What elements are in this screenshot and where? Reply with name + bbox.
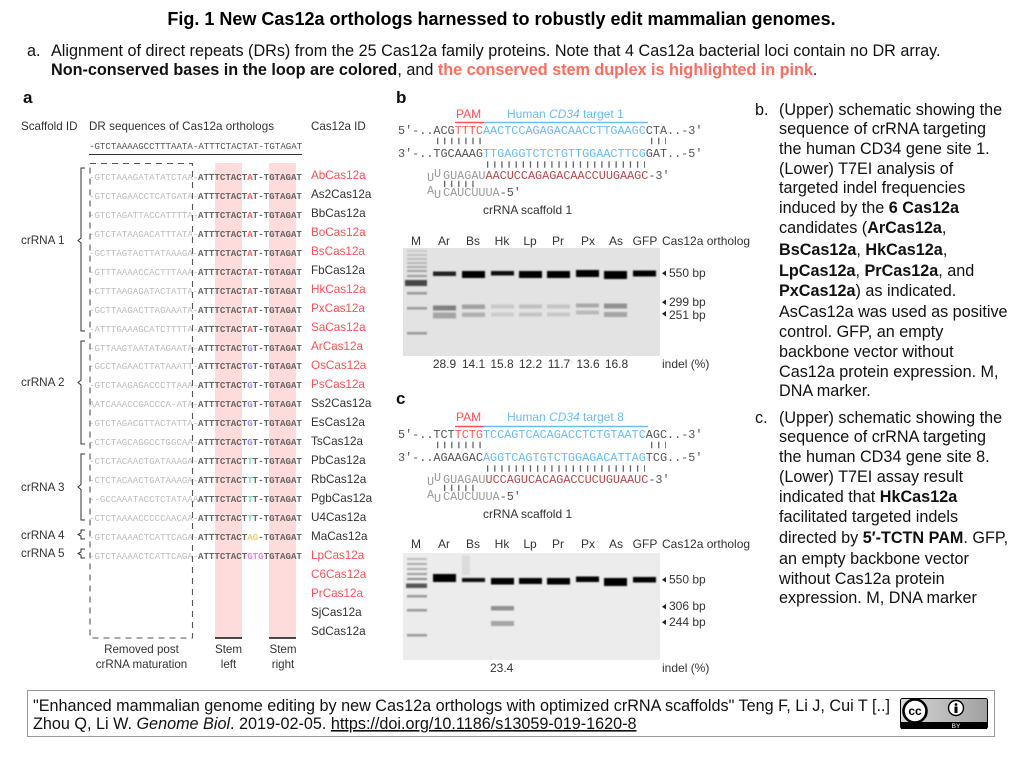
- crRNA structure c: A: [427, 488, 435, 502]
- crRNA structure c: GUAGAUUCCAGUCACAGACCUCUGUAAUC-3′: [443, 473, 670, 487]
- conserved sequences: ATTTCTACTTT-TGTAGAT: [198, 456, 302, 467]
- caption b: b.: [755, 101, 769, 119]
- scaffold labels: crRNA 5: [21, 547, 65, 560]
- gel c lane labels: Lp: [523, 537, 537, 551]
- removed sequences: AATCAAACCGACCCA-ATA-: [89, 399, 198, 410]
- caption a: a.: [27, 42, 41, 60]
- gel c lane labels: M: [411, 537, 421, 551]
- conserved sequences: ATTTCTACTAT-TGTAGAT: [198, 210, 302, 221]
- gel b lane labels: Cas12a ortholog: [662, 234, 750, 248]
- removed sequences: -GTCTATAAGACATTTATA-: [89, 229, 198, 240]
- Cas12a names: BbCas12a: [311, 207, 366, 220]
- gel c lane labels: Bs: [466, 537, 480, 551]
- scaffold labels: crRNA 2: [21, 376, 65, 389]
- Cas12a names: PrCas12a: [311, 587, 363, 600]
- gel c lane labels: Pr: [552, 537, 564, 551]
- removed sequences: -GCCTAGAACTTATAAATT-: [89, 361, 198, 372]
- removed sequences: -GTTAAGTAATATAGAATA-: [89, 343, 198, 354]
- scaffold labels: crRNA 4: [21, 529, 65, 542]
- gel b lane labels: As: [609, 234, 623, 248]
- caption a: [27, 42, 941, 79]
- consensus sequence: -GTCTAAAAGCCTTTAATA-ATTTCTACTAT-TGTAGAT: [89, 141, 303, 152]
- panel letter c: c: [396, 389, 405, 408]
- Cas12a names: PbCas12a: [311, 454, 366, 467]
- PAM and target labels: [455, 107, 648, 122]
- Cas12a names: Ss2Cas12a: [311, 397, 372, 410]
- conserved sequences: ATTTCTACTAG-TGTAGAT: [198, 532, 302, 543]
- gel b lane labels: Px: [581, 234, 595, 248]
- removed sequences: -GTTTAAAACCACTTTAAA-: [89, 267, 198, 278]
- gel b lane labels: GFP: [633, 234, 657, 248]
- removed sequences: -GCTTAGTACTTATAAAGA-: [89, 248, 198, 259]
- gel b lane labels: Ar: [438, 234, 450, 248]
- removed sequences: -GTCTAAAACTCATTCAGA-: [89, 532, 198, 543]
- gel c indel values: indel (%): [662, 661, 709, 675]
- caption b: induced by the 6 Cas12a: [779, 199, 960, 217]
- gel b indel values: [433, 357, 709, 371]
- gel b size markers: 299 bp: [669, 295, 706, 309]
- target strand sequences: 3′-..TGCAAAGTTGAGGTCTCTGTTGGAACTTCGGAT..-5′: [398, 147, 702, 161]
- caption a: Non-conserved bases in the loop are colored, and the conserved stem duplex is highlighted in pink.: [51, 61, 817, 79]
- panel c schematic: [396, 389, 702, 521]
- conserved sequences: ATTTCTACTGT-TGTAGAT: [198, 399, 302, 410]
- crRNA structure: CAUCUUUA-5′: [443, 186, 521, 200]
- conserved sequences: ATTTCTACTAT-TGTAGAT: [198, 191, 302, 202]
- conserved sequences: ATTTCTACTGT-TGTAGAT: [198, 361, 302, 372]
- scaffold label b: crRNA scaffold 1: [483, 203, 572, 217]
- conserved sequences: ATTTCTACTTT-TGTAGAT: [198, 475, 302, 486]
- gel b lane labels: Hk: [495, 234, 510, 248]
- citation text: "Enhanced mammalian genome editing by new Cas12a orthologs with optimized crRNA scaffolds" Teng F, Li J, Cui T [..]: [33, 697, 890, 715]
- caption c: (Lower) T7EI assay result: [779, 468, 964, 486]
- gel b lane labels: Pr: [552, 234, 564, 248]
- conserved sequences: ATTTCTACTAT-TGTAGAT: [198, 305, 302, 316]
- conserved sequences: ATTTCTACTGT-TGTAGAT: [198, 437, 302, 448]
- Cas12a names: PsCas12a: [311, 378, 365, 391]
- gel c indel values: [490, 661, 709, 675]
- gel b lane labels: Bs: [466, 234, 480, 248]
- conserved sequences: ATTTCTACTAT-TGTAGAT: [198, 229, 302, 240]
- caption b: [755, 101, 1008, 400]
- scaffold labels: crRNA 3: [21, 481, 65, 494]
- caption b: (Upper) schematic showing the: [779, 101, 1002, 119]
- caption c: without Cas12a protein: [778, 570, 945, 588]
- dashed removed region box: [90, 164, 192, 638]
- bottom annotations: Stem: [269, 643, 297, 656]
- panel a: DR alignment: [21, 88, 373, 671]
- gel c lane labels: Px: [581, 537, 595, 551]
- removed sequences: -CTCTAAAACCCCCAACAA-: [89, 513, 198, 524]
- citation text: [33, 697, 890, 733]
- Cas12a names: FbCas12a: [311, 264, 365, 277]
- column headers: Scaffold ID: [21, 120, 78, 133]
- caption b: BsCas12a, HkCas12a,: [779, 241, 947, 259]
- Cas12a names: SjCas12a: [311, 606, 362, 619]
- Cas12a names: [311, 169, 373, 638]
- gel c size markers: 550 bp: [669, 572, 706, 586]
- caption b: the human CD34 gene site 1.: [779, 140, 990, 158]
- gel c: [403, 537, 750, 675]
- gel c size markers: [662, 572, 706, 629]
- crRNA structure c: U: [434, 492, 441, 506]
- conserved sequences: ATTTCTACTAT-TGTAGAT: [198, 248, 302, 259]
- title: Fig. 1 New Cas12a orthologs harnessed to robustly edit mammalian genomes.: [167, 9, 836, 29]
- scaffold labels: crRNA 1: [21, 234, 65, 247]
- scaffold label c: crRNA scaffold 1: [483, 507, 572, 521]
- panel letter b: b: [396, 88, 406, 107]
- gel b lane labels: M: [411, 234, 421, 248]
- gel c lane labels: As: [609, 537, 623, 551]
- conserved sequences: ATTTCTACTAT-TGTAGAT: [198, 172, 302, 183]
- Cas12a names: AbCas12a: [311, 169, 366, 182]
- caption b: backbone vector without: [779, 343, 954, 361]
- crRNA structure: U: [434, 188, 441, 202]
- removed sequences: -GTCTAGACGTTACTATTA-: [89, 418, 198, 429]
- gel b indel values: 28.9: [433, 357, 457, 371]
- crRNA structure: A: [427, 184, 435, 198]
- crRNA structure: GUAGAUAACUCCAGAGACAACCUUGAAGC-3′: [443, 169, 670, 183]
- gel c indel values: 23.4: [490, 661, 514, 675]
- CC BY badge: cc: [908, 704, 922, 718]
- removed sequences: -CTTTAAGAGATACTATTA-: [89, 286, 198, 297]
- gel b: [403, 234, 750, 371]
- removed sequences: -CTCTAGCAGGCCTGGCAA-: [89, 437, 198, 448]
- scaffold brackets: [78, 168, 85, 558]
- Cas12a names: As2Cas12a: [311, 188, 372, 201]
- crRNA structure c: CAUCUUUA-5′: [443, 490, 521, 504]
- gel b image: [403, 248, 660, 356]
- caption c: expression. M, DNA marker: [779, 589, 978, 607]
- gel b size markers: [662, 266, 706, 322]
- target strand sequences c: 5′-..TCTTCTGTCCAGTCACAGACCTCTGTAATCAGC..-3′: [398, 428, 702, 442]
- scaffold labels: [21, 234, 65, 560]
- column headers: DR sequences of Cas12a orthologs: [89, 120, 274, 133]
- CC BY badge: BY: [952, 723, 961, 730]
- removed sequences: -GTCTAAAGATATATCTAA-: [89, 172, 198, 183]
- conserved sequences: ATTTCTACTAT-TGTAGAT: [198, 286, 302, 297]
- conserved sequences: ATTTCTACTGT-TGTAGAT: [198, 343, 302, 354]
- conserved sequences: ATTTCTACTGT-TGTAGAT: [198, 380, 302, 391]
- conserved sequences: ATTTCTACTAT-TGTAGAT: [198, 324, 302, 335]
- target strand sequences: 5′-..ACGTTTCAACTCCAGAGACAACCTTGAAGCCTA..-3′: [398, 124, 702, 138]
- removed sequences: --GCCAAATACCTCTATAAA: [89, 494, 199, 505]
- target strand sequences c: 3′-..AGAAGACAGGTCAGTGTCTGGAGACATTAGTCG..-5′: [398, 451, 702, 465]
- removed sequences: -GTCTAGAACCTCATGATA-: [89, 191, 198, 202]
- caption b: (Lower) T7EI analysis of: [779, 160, 954, 178]
- crRNA structure c: U: [427, 475, 434, 489]
- citation text: Zhou Q, Li W. Genome Biol. 2019-02-05. https://doi.org/10.1186/s13059-019-1620-8: [33, 715, 637, 733]
- removed sequences: -CTCTACAACTGATAAAGA-: [89, 456, 198, 467]
- caption b: targeted indel frequencies: [779, 179, 965, 197]
- PAM and target labels: Human CD34 target 1: [507, 107, 624, 121]
- Cas12a names: SaCas12a: [311, 321, 366, 334]
- bottom annotations: right: [272, 658, 295, 671]
- removed sequences: -ATTTGAAAGCATCTTTTA-: [89, 324, 198, 335]
- caption c: facilitated targeted indels: [779, 508, 958, 526]
- Cas12a names: LpCas12a: [311, 549, 365, 562]
- gel c size markers: 244 bp: [669, 615, 706, 629]
- column headers: Cas12a ID: [311, 120, 366, 133]
- caption c: (Upper) schematic showing the: [779, 409, 1002, 427]
- Cas12a names: BsCas12a: [311, 245, 365, 258]
- gel b indel values: indel (%): [662, 357, 709, 371]
- gel c image: [403, 553, 660, 660]
- Cas12a names: ArCas12a: [311, 340, 363, 353]
- stem baseline bars: [215, 637, 296, 639]
- caption c: [755, 409, 1008, 607]
- Cas12a names: C6Cas12a: [311, 568, 367, 581]
- gel b indel values: 16.8: [605, 357, 629, 371]
- citation box: [28, 690, 994, 736]
- gel b indel values: 14.1: [462, 357, 486, 371]
- removed sequences: -GTCTAAAACTCATTCAGA-: [89, 551, 198, 562]
- caption b: candidates (ArCas12a,: [779, 219, 946, 237]
- gel c lane labels: Hk: [495, 537, 510, 551]
- gel c lane labels: GFP: [633, 537, 657, 551]
- Cas12a names: PgbCas12a: [311, 492, 373, 505]
- caption b: control. GFP, an empty: [779, 323, 944, 341]
- gel b size markers: 251 bp: [669, 308, 706, 322]
- gel b indel values: 12.2: [519, 357, 543, 371]
- bottom annotations: Stem: [215, 643, 242, 656]
- bottom annotations: Removed post: [104, 643, 180, 656]
- caption b: AsCas12a was used as positive: [779, 303, 1008, 321]
- caption c: an empty backbone vector: [779, 550, 969, 568]
- PAM and target labels c: Human CD34 target 8: [507, 410, 624, 424]
- caption b: sequence of crRNA targeting: [779, 120, 986, 138]
- Cas12a names: RbCas12a: [311, 473, 367, 486]
- gel b indel values: 13.6: [576, 357, 600, 371]
- gel b indel values: 11.7: [548, 357, 571, 371]
- caption c: c.: [755, 409, 768, 427]
- Cas12a names: HkCas12a: [311, 283, 366, 296]
- bottom annotations: [96, 643, 297, 671]
- Cas12a names: MaCas12a: [311, 530, 368, 543]
- column headers: [21, 120, 366, 133]
- Cas12a names: EsCas12a: [311, 416, 365, 429]
- Cas12a names: SdCas12a: [311, 625, 366, 638]
- target strand sequences: [398, 124, 702, 164]
- Cas12a names: BoCas12a: [311, 226, 366, 239]
- caption a: Alignment of direct repeats (DRs) from the 25 Cas12a family proteins. Note that 4 Cas12a bacterial loci contain no DR array.: [51, 42, 941, 60]
- caption b: LpCas12a, PrCas12a, and: [779, 262, 974, 280]
- gel b size markers: 550 bp: [669, 266, 706, 280]
- conserved sequences: ATTTCTACTTT-TGTAGAT: [198, 513, 302, 524]
- caption b: Cas12a protein expression. M,: [779, 363, 999, 381]
- Cas12a names: TsCas12a: [311, 435, 363, 448]
- caption b: DNA marker.: [779, 382, 871, 400]
- panel b schematic: [396, 88, 702, 217]
- caption c: directed by 5′-TCTN PAM. GFP,: [779, 529, 1008, 547]
- PAM and target labels c: PAM: [456, 410, 481, 424]
- gel c size markers: 306 bp: [669, 599, 706, 613]
- conserved sequences: ATTTCTACTAT-TGTAGAT: [198, 267, 302, 278]
- gel c lane labels: Cas12a ortholog: [662, 537, 750, 551]
- crRNA structure: U: [434, 167, 441, 181]
- conserved sequences: ATTTCTACTGTGTGTAGAT: [198, 551, 302, 562]
- caption c: sequence of crRNA targeting: [779, 428, 986, 446]
- Cas12a names: PxCas12a: [311, 302, 365, 315]
- bottom annotations: left: [221, 658, 237, 671]
- panel letter a: a: [23, 88, 33, 107]
- removed sequences: -GCTTAAGACTTAGAAATA-: [89, 305, 198, 316]
- removed sequences: -GTCTAAGAGACCCTTAAA-: [89, 380, 198, 391]
- removed sequences: -CTCTACAACTGATAAAGA-: [89, 475, 198, 486]
- caption c: indicated that HkCas12a: [779, 488, 958, 506]
- gel c lane labels: Ar: [438, 537, 450, 551]
- crRNA structure c: [427, 471, 670, 506]
- CC BY badge: [900, 698, 988, 730]
- conserved sequences: ATTTCTACTTT-TGTAGAT: [198, 494, 302, 505]
- crRNA structure: U: [427, 171, 434, 185]
- conserved sequences: ATTTCTACTGT-TGTAGAT: [198, 418, 302, 429]
- crRNA structure c: U: [434, 471, 441, 485]
- caption c: the human CD34 gene site 8.: [779, 448, 990, 466]
- gel b lane labels: [411, 234, 750, 248]
- stem highlights: [215, 163, 296, 638]
- removed sequences: -GTCTAGATTACCATTTTA-: [89, 210, 198, 221]
- Cas12a names: OsCas12a: [311, 359, 367, 372]
- PAM and target labels: PAM: [456, 107, 481, 121]
- gel b indel values: 15.8: [490, 357, 514, 371]
- conserved sequences: [198, 172, 302, 562]
- gel b lane labels: Lp: [523, 234, 537, 248]
- removed sequences: [89, 172, 199, 562]
- crRNA structure: [427, 167, 670, 202]
- target strand sequences c: [398, 428, 702, 468]
- gel c lane labels: [411, 537, 750, 551]
- Cas12a names: U4Cas12a: [311, 511, 367, 524]
- bottom annotations: crRNA maturation: [96, 658, 187, 671]
- PAM and target labels c: [455, 410, 648, 426]
- caption b: PxCas12a) as indicated.: [779, 282, 956, 300]
